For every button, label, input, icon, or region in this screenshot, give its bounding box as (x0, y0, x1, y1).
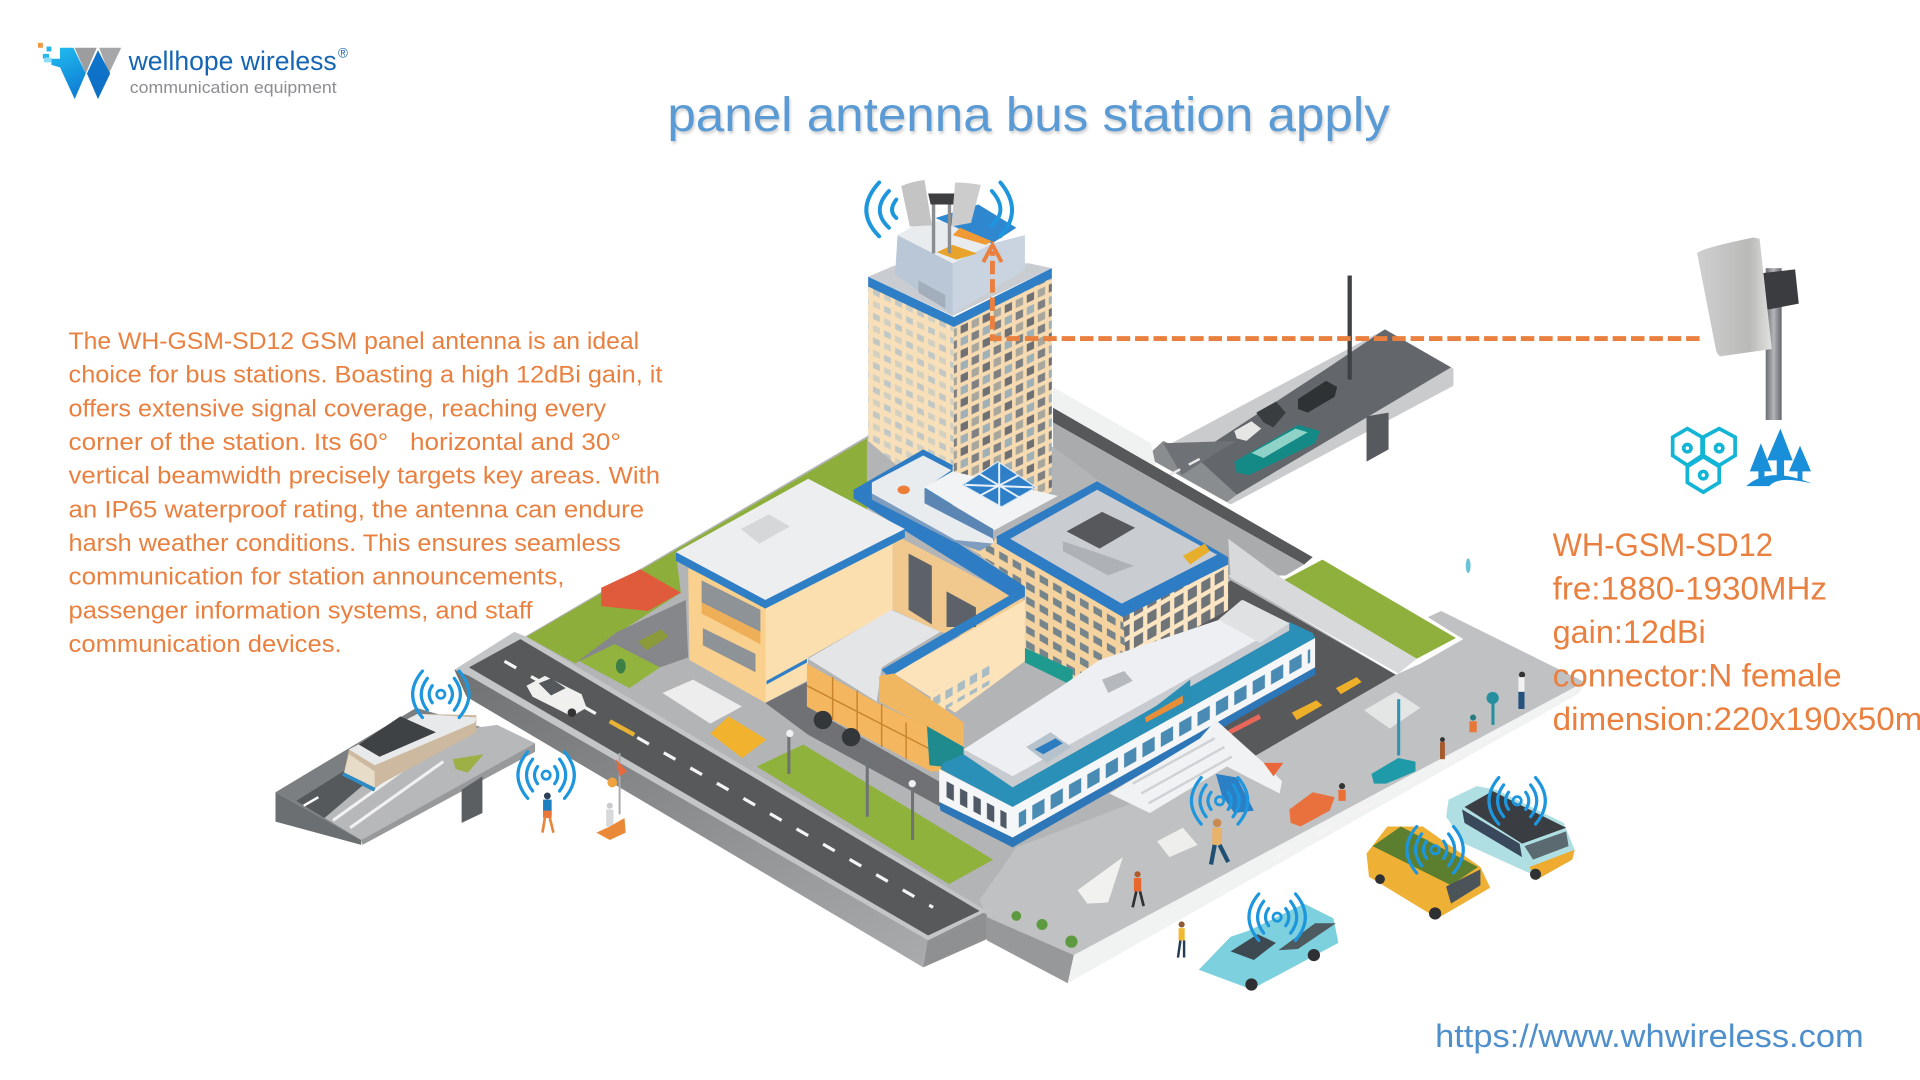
signal icon: van (1407, 827, 1463, 873)
logo tagline: communication equipment (130, 78, 337, 97)
blue dome (962, 462, 1036, 507)
product specifications: connector:N female (1553, 657, 1842, 693)
description text block: passenger information systems, and staff (69, 597, 533, 624)
elevated road, lower left (276, 708, 535, 845)
back wall strip behind the complex (1053, 387, 1313, 576)
sidewalk lane marks (1273, 731, 1500, 860)
teal awning (940, 622, 1315, 807)
signal waves right of tower (992, 182, 1012, 236)
orange car (1289, 792, 1335, 827)
blue roof frame (853, 449, 953, 544)
light strip beside grass (1228, 539, 1417, 673)
panel shadow (1063, 541, 1134, 576)
roof 2 surface (1010, 490, 1217, 604)
complex rear building (853, 449, 1228, 686)
orange trailer (807, 664, 964, 771)
station main block (939, 600, 1315, 847)
rooftop panel antennas (901, 180, 981, 253)
product specifications: WH-GSM-SD12 (1553, 527, 1773, 563)
teal strip (1025, 648, 1073, 686)
rooftop equipment (1026, 732, 1071, 763)
description text block: communication devices. (69, 631, 342, 658)
person under road signal (542, 792, 553, 833)
upper windows (702, 580, 760, 632)
tower right wall (954, 274, 1052, 514)
elevated road vehicles (1234, 381, 1337, 475)
mounting pole (1766, 268, 1782, 420)
mounting bracket (1763, 269, 1799, 310)
ground platform (469, 435, 1584, 983)
icon: trees (1746, 429, 1812, 486)
station sign (1136, 680, 1190, 725)
rear tan wall with windows (950, 534, 1127, 686)
right tan wall (1123, 564, 1228, 666)
tower (868, 204, 1052, 514)
red kiosk (1264, 763, 1283, 776)
registered mark: ® (338, 46, 348, 61)
small shrubs (1011, 911, 1078, 948)
block roof (872, 456, 993, 544)
description text block: vertical beamwidth precisely targets key areas. With (69, 463, 660, 490)
description text block: harsh weather conditions. This ensures seamless (69, 530, 621, 557)
person white shirt (1518, 672, 1525, 709)
teal shop sign (927, 726, 964, 769)
description text block: choice for bus stations. Boasting a high 12dBi gain, it (69, 362, 663, 389)
yellow vehicle on roof (1183, 544, 1210, 564)
sidewalk (980, 611, 1584, 955)
yellow building (676, 479, 905, 703)
station stairs (1109, 720, 1282, 813)
small grass patch (579, 644, 660, 688)
panel antenna product (1697, 238, 1799, 420)
person walking (1211, 819, 1228, 864)
lamp post (1397, 699, 1400, 756)
courtyard road (1102, 580, 1396, 757)
vehicles and people on the sidewalk (1011, 672, 1525, 958)
windows, long side (1019, 649, 1310, 828)
red canopy (601, 569, 681, 611)
dashed signal line with arrow (983, 245, 1700, 339)
signal icon: left bus (413, 671, 469, 718)
tower roof panels (936, 204, 1016, 260)
logo (38, 43, 348, 99)
person dark (1440, 737, 1445, 759)
person yellow shirt (1178, 921, 1185, 958)
tower blue parapet (868, 268, 1052, 327)
road yellow mark (610, 721, 634, 735)
poles on grass (786, 730, 916, 840)
blue wall band (853, 490, 1025, 596)
roof unit (1218, 600, 1289, 643)
person and orange stand (596, 753, 627, 840)
olive slab (638, 629, 669, 650)
isometric bus station illustration (276, 180, 1584, 991)
white car (527, 676, 587, 717)
blue sculpture (1216, 774, 1254, 813)
description text block: an IP65 waterproof rating, the antenna can endure (69, 496, 644, 523)
gold pallet (710, 716, 767, 758)
blue base strip (767, 659, 807, 684)
left wall (688, 568, 765, 703)
description text block: offers extensive signal coverage, reaching every (69, 395, 607, 422)
roof 2 border (997, 481, 1228, 617)
white pad (662, 680, 742, 724)
tower back parapet (868, 263, 1052, 316)
blue car (1199, 904, 1338, 991)
inner courtyard large window (909, 553, 932, 624)
elevated road, upper right (1146, 276, 1453, 504)
right wall (765, 536, 893, 703)
main road (454, 632, 987, 967)
product specifications: fre:1880-1930MHz (1553, 570, 1827, 606)
description text block: corner of the station. Its 60° horizontal and 30° (69, 429, 621, 456)
product specifications (1553, 527, 1920, 737)
left field grass (527, 438, 867, 664)
street sign (1491, 700, 1494, 725)
solar panel (1067, 512, 1135, 549)
inner courtyard second window (947, 591, 976, 627)
logo mark (38, 43, 121, 99)
dome platform wall (924, 489, 993, 539)
right grass strip (1283, 560, 1456, 659)
tower roof box (895, 235, 953, 315)
shrub (616, 659, 626, 673)
tower left wall (868, 282, 954, 514)
driveway (765, 682, 943, 808)
roof (676, 479, 905, 600)
signal icon: station plaza (1191, 778, 1248, 824)
front grass strip (757, 744, 993, 884)
lower windows (703, 628, 756, 672)
description text block: The WH-GSM-SD12 GSM panel antenna is an ideal (69, 328, 639, 355)
teal kiosk car (1371, 758, 1416, 784)
signal icon: car (1249, 894, 1305, 940)
signal icon: pedestrian (518, 752, 574, 798)
person seated (1469, 714, 1477, 732)
orange beacon (898, 486, 910, 494)
block front wall (872, 493, 993, 551)
signal speck (1466, 558, 1471, 573)
logo name: wellhope wireless (128, 46, 337, 76)
icon: hexagon cells (1673, 429, 1735, 492)
product specifications: gain:12dBi (1553, 614, 1706, 650)
road lane dashes (504, 661, 933, 907)
dome platform (924, 471, 1058, 530)
description text block (69, 328, 663, 658)
signal icon: bus (1489, 778, 1545, 824)
product specifications: dimension:220x190x50m (1553, 701, 1920, 737)
blue base (939, 667, 1315, 847)
person orange (1338, 783, 1346, 801)
windows, short side (944, 780, 1007, 829)
left road bus (343, 714, 476, 790)
person orange jacket (1133, 871, 1144, 907)
roof lip (964, 622, 1289, 787)
white wall (939, 638, 1315, 838)
front courtyard building (879, 587, 1025, 747)
inner courtyard wall (893, 534, 1025, 649)
signal waves left of tower (866, 182, 896, 236)
van, yellow with green roof (1367, 827, 1490, 920)
left pit (578, 600, 688, 667)
orange lintel (702, 602, 760, 644)
title: panel antenna bus station apply (667, 89, 1390, 142)
bus, blue with dark roof (1446, 786, 1575, 880)
description text block: communication for station announcements, (69, 564, 564, 591)
station white roof (964, 600, 1289, 776)
panel body (1697, 238, 1772, 356)
courtyard floor (808, 610, 940, 702)
website url: https://www.whwireless.com (1435, 1018, 1864, 1054)
